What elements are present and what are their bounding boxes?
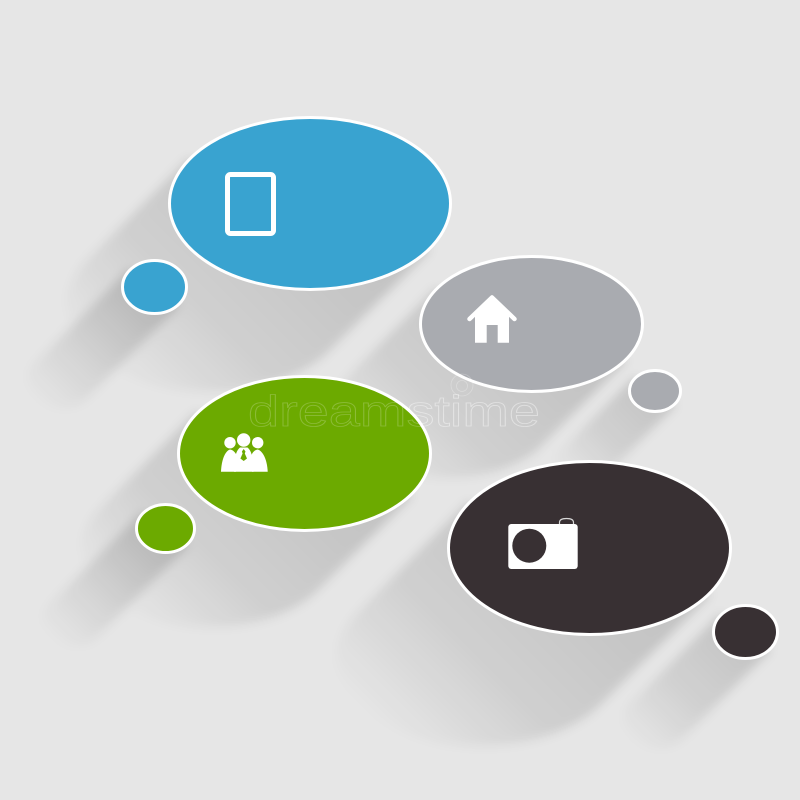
long shadows <box>28 158 771 748</box>
bubble: dark camera <box>448 462 778 658</box>
bubble: green team <box>136 376 430 552</box>
icon: house <box>470 298 514 343</box>
icon: camera <box>508 518 578 569</box>
bubble: gray home <box>420 256 680 412</box>
icon: team of people <box>221 433 268 472</box>
icon: tablet <box>228 174 274 234</box>
watermark: dreamstime <box>248 387 540 436</box>
bubble: blue tablet <box>122 118 450 314</box>
watermark <box>248 374 540 436</box>
green bubble watermark overlay: dreamstime <box>248 387 540 436</box>
